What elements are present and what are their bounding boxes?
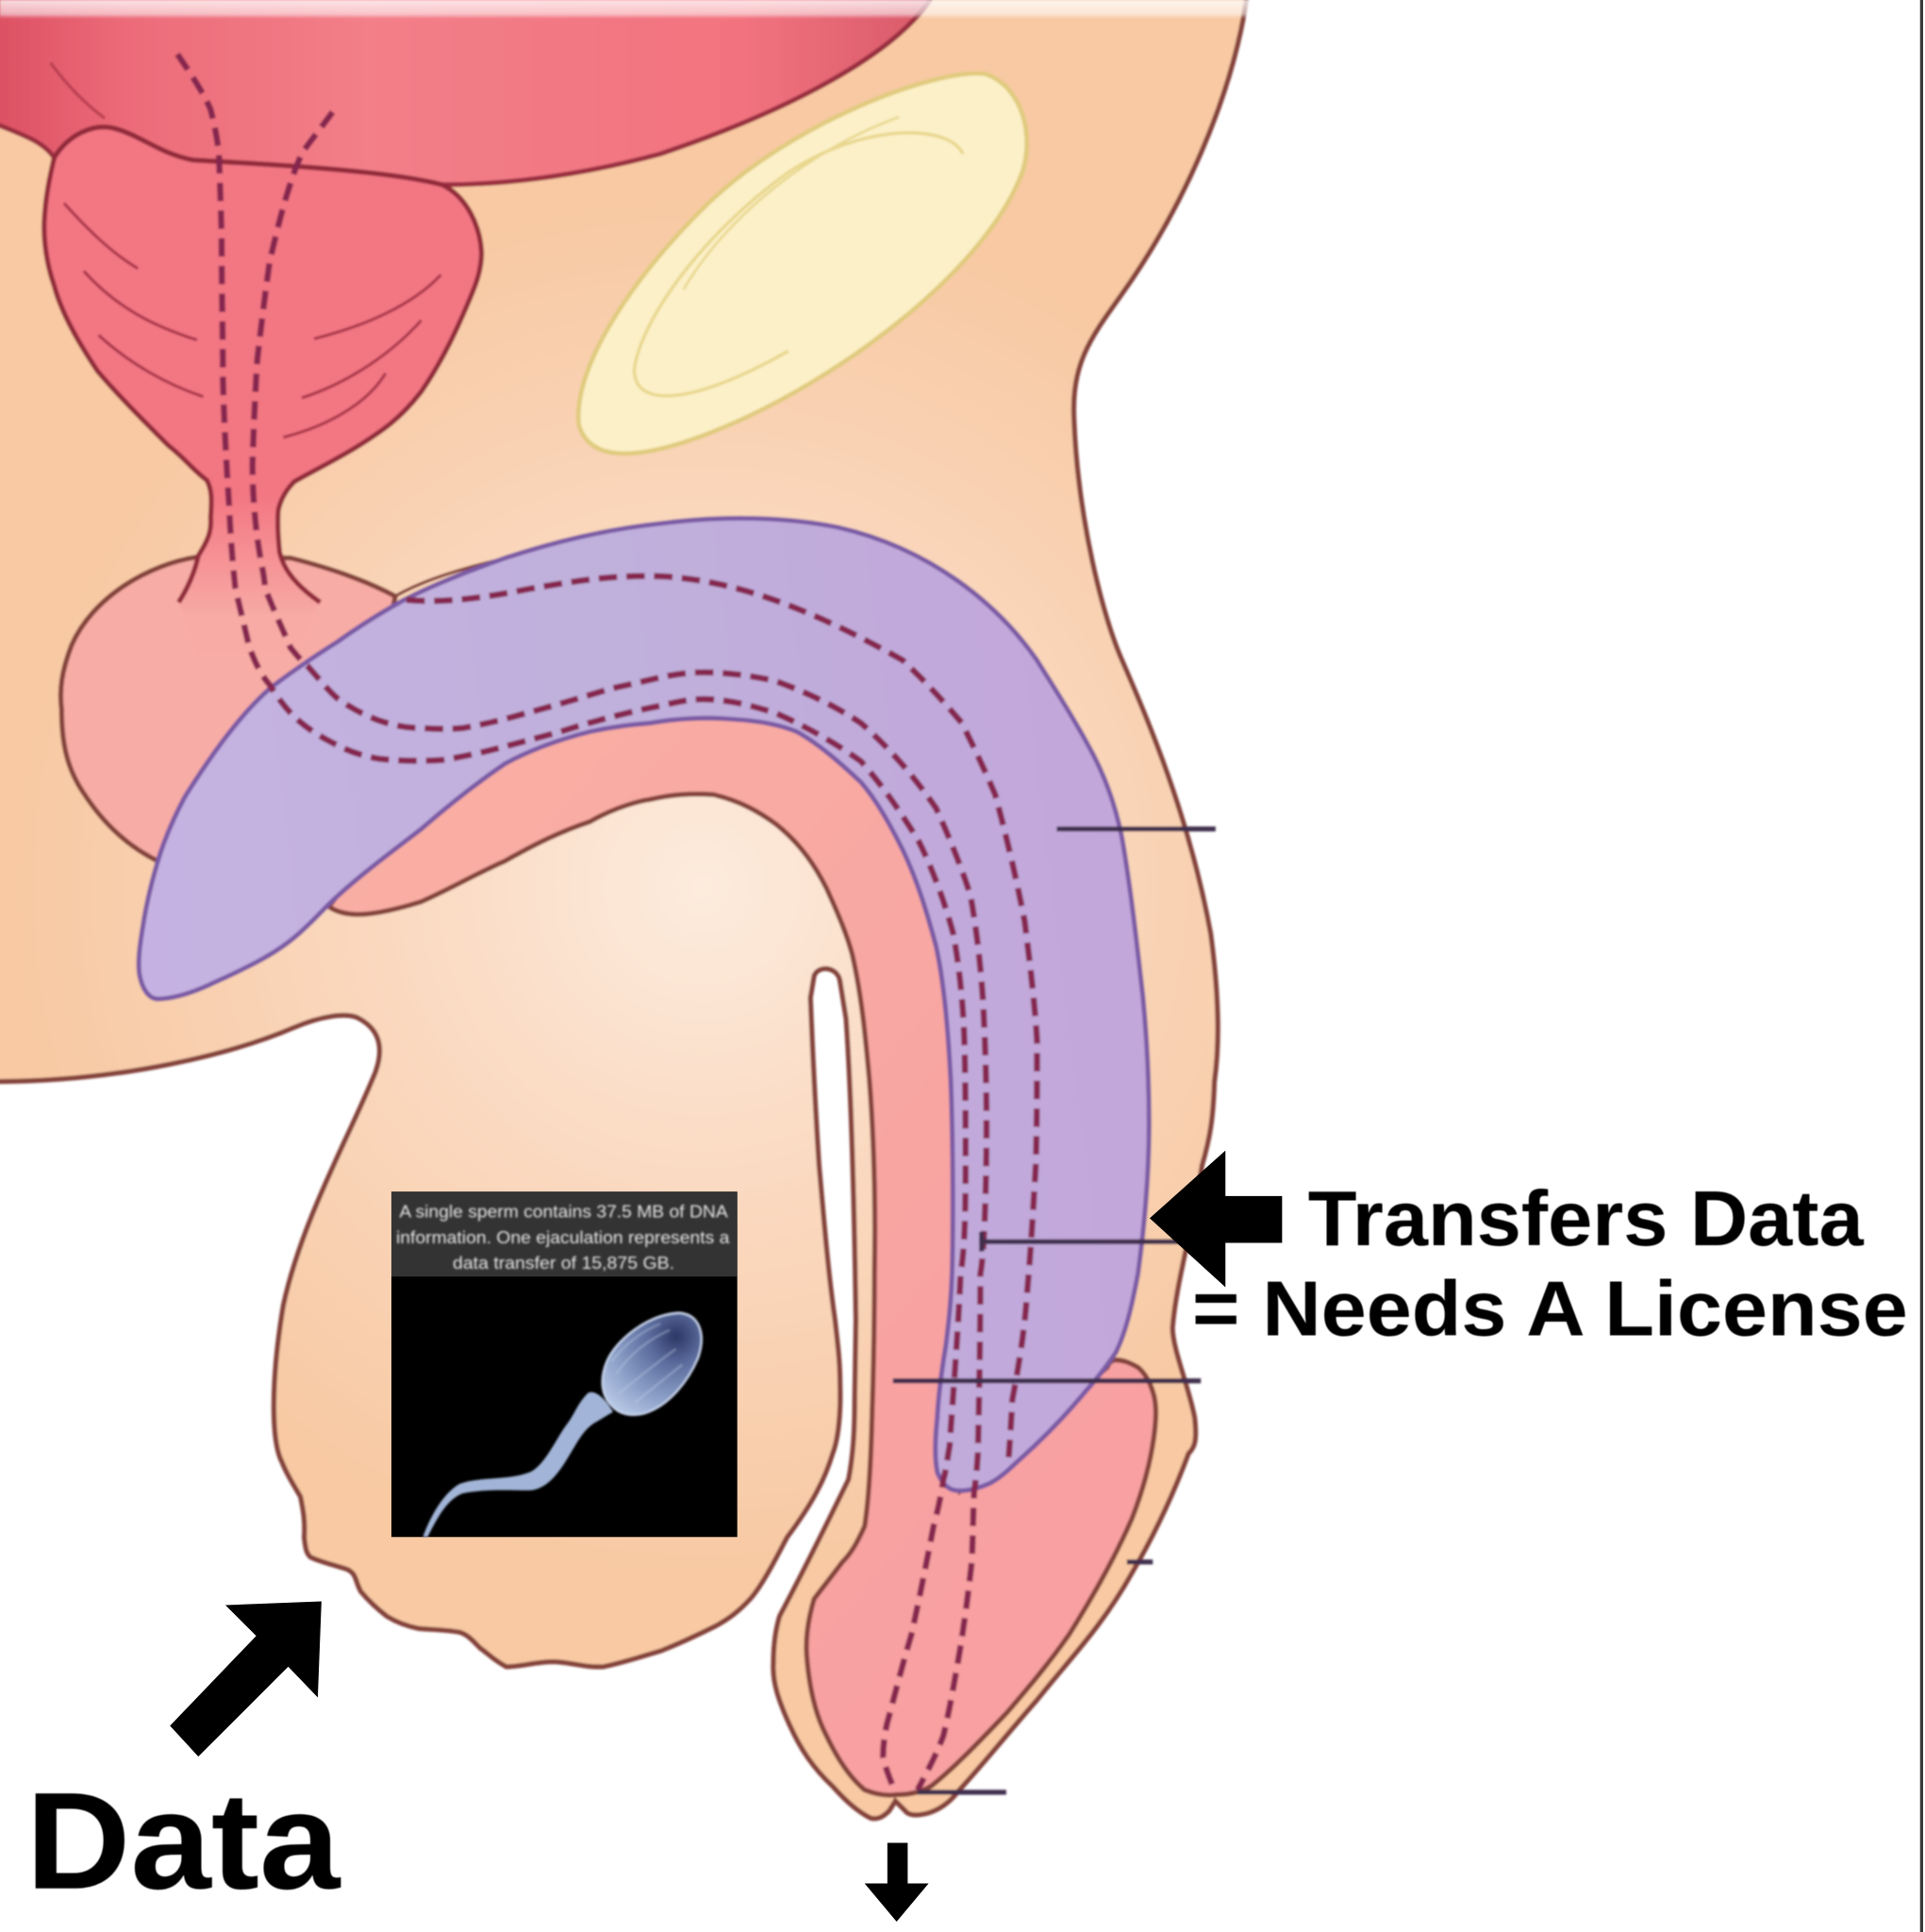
- urethral tissue and glans: [329, 690, 1156, 1795]
- arrow: pointing down: [865, 1842, 929, 1922]
- top edge fade: [0, 0, 1256, 19]
- caption bar: information. One ejaculation represents a: [396, 1227, 730, 1247]
- body skin outline: [0, 0, 1246, 1819]
- dashed ducts: [177, 54, 1037, 1790]
- prostate: [44, 127, 482, 653]
- right edge border: [1920, 0, 1923, 1932]
- label: transfers data: Transfers Data: [1308, 1176, 1865, 1262]
- pelvic bone: [578, 74, 1027, 454]
- arrow: pointing to scrotum: [170, 1602, 322, 1757]
- bulb: [60, 557, 395, 907]
- bladder: [0, 0, 930, 185]
- panel background: [391, 1191, 738, 1537]
- label leader lines: [893, 829, 1216, 1792]
- label: data: Data: [25, 1764, 341, 1918]
- caption bar: [391, 1191, 738, 1276]
- anatomical illustration: [0, 0, 1256, 1819]
- sperm illustration: [423, 1313, 702, 1537]
- caption bar: data transfer of 15,875 GB.: [453, 1253, 674, 1273]
- label: needs a license: = Needs A License: [1192, 1266, 1908, 1352]
- arrow: pointing to shaft: [1150, 1151, 1282, 1288]
- upper purple flap line: [395, 556, 517, 596]
- erectile tissue: [139, 518, 1149, 1491]
- sperm image panel: [391, 1191, 738, 1537]
- caption bar: A single sperm contains 37.5 MB of DNA: [399, 1202, 728, 1222]
